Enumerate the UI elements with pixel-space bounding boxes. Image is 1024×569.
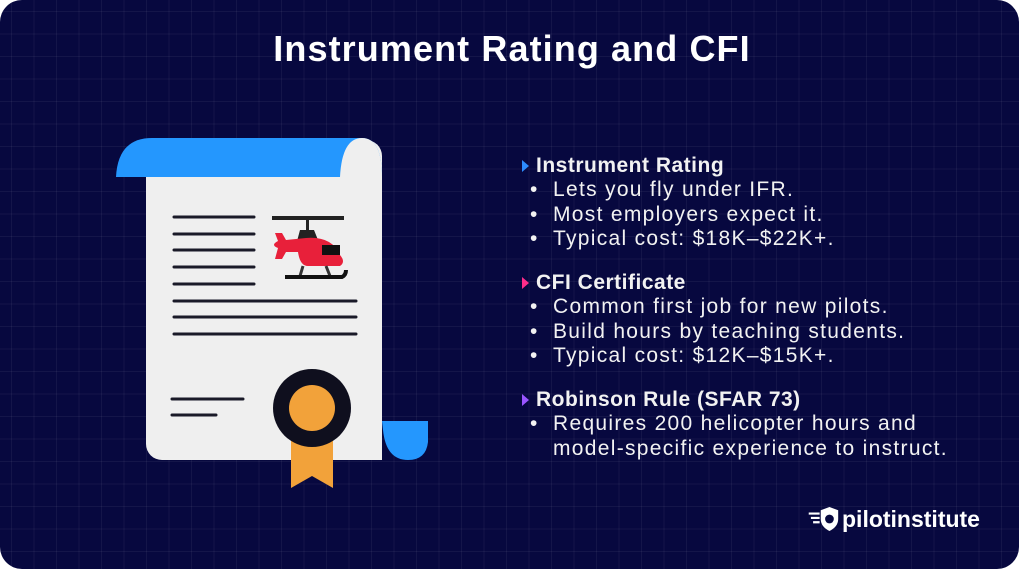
title: Instrument Rating and CFI <box>273 28 751 69</box>
section: Instrument Rating: • <box>530 227 539 250</box>
section: CFI Certificate: Common first job for new pilots. <box>553 295 889 318</box>
section: Instrument Rating: Instrument Rating <box>536 154 724 177</box>
section: CFI Certificate: CFI Certificate <box>536 271 686 294</box>
section: Instrument Rating: • <box>530 178 539 201</box>
icon: helicopter <box>272 216 346 277</box>
section: Instrument Rating <box>522 154 835 250</box>
logo: pilotinstitute: pilotinstitute <box>842 506 980 532</box>
illustration: certificate scroll <box>116 138 428 488</box>
section: Instrument Rating: Lets you fly under IFR. <box>553 178 794 201</box>
section: Robinson Rule: • <box>530 412 539 435</box>
section: Robinson Rule <box>522 388 948 460</box>
section: Instrument Rating: • <box>530 202 539 226</box>
section: Instrument Rating: Most employers expect it. <box>553 202 824 226</box>
section: CFI Certificate: • <box>530 295 539 318</box>
section: CFI Certificate: • <box>530 344 539 367</box>
section: CFI Certificate <box>522 271 905 367</box>
section: Robinson Rule: Robinson Rule (SFAR 73) <box>536 388 801 411</box>
section: CFI Certificate: Typical cost: $12K–$15K+. <box>553 344 835 367</box>
section: Robinson Rule: Requires 200 helicopter hours and <box>553 412 917 435</box>
section: CFI Certificate: • <box>530 320 539 342</box>
section: Instrument Rating: Typical cost: $18K–$22K+. <box>553 227 835 250</box>
icon: award seal <box>273 369 351 488</box>
section: Robinson Rule: model-specific experience to instruct. <box>553 436 948 460</box>
section: CFI Certificate: Build hours by teaching students. <box>553 320 905 342</box>
